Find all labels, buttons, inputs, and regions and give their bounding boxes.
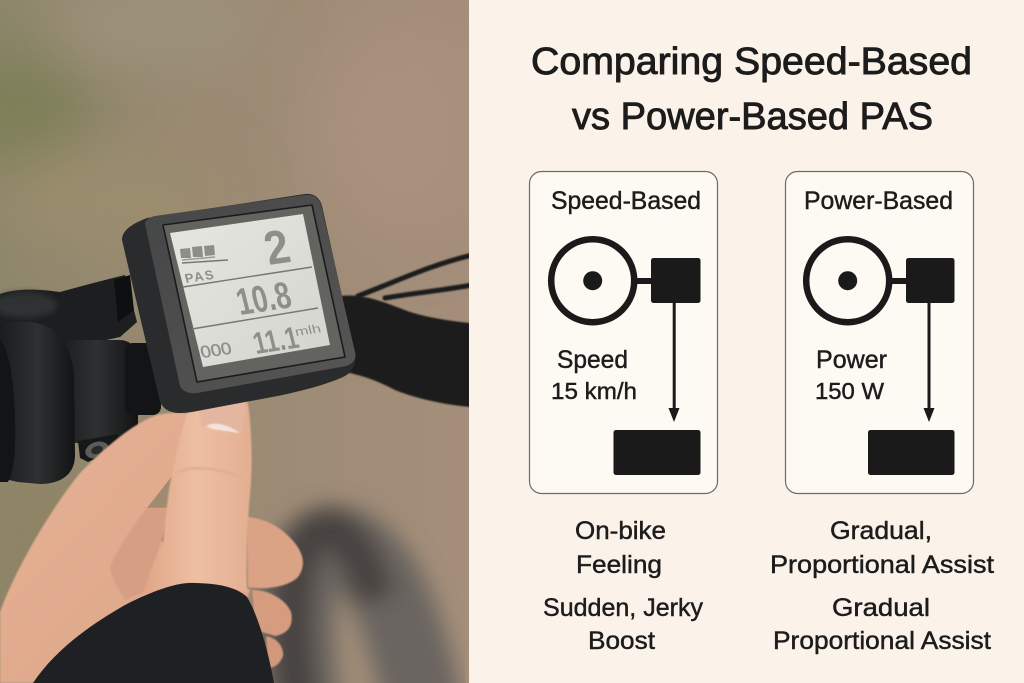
LCD reading: 10.8: 10.8 [232,275,296,324]
title: Comparing Speed-Based [531,41,972,83]
measure label: 150 W [815,378,884,404]
thumb knuckle crease [178,467,231,474]
LCD label: PAS: PAS [183,267,217,286]
text: speed-based on-bike feeling [543,517,703,655]
title [531,41,972,138]
text: speed-based on-bike feeling: Boost [588,627,655,655]
brake cables [358,255,472,298]
text: power-based on-bike feeling: Proportional Assist [770,551,994,579]
left handlebar and grip [0,275,161,484]
text: speed-based on-bike feeling: Feeling [576,551,662,579]
icon: wheel [806,239,889,322]
display bezel [145,195,355,393]
measure label: Speed [557,346,628,374]
sleeve [33,583,274,683]
connector to sensor [890,278,908,284]
panel: speed-based [530,172,718,494]
text: power-based on-bike feeling [770,517,994,655]
LCD divider lines [182,257,318,329]
arrow to motor [924,302,934,422]
panel: power-based [786,172,974,494]
LCD reading: assist level: 2 [259,221,295,276]
icon: sensor box [651,258,700,303]
photo: hand adjusting e-bike display on handlebar [0,0,490,683]
icon: sensor box [906,258,954,303]
thumb [162,402,252,591]
measure label [551,346,637,404]
text: power-based on-bike feeling: Gradual, [830,517,932,545]
measure label: 15 km/h [551,378,637,404]
hand palm [0,413,250,683]
icon: motor box [614,430,700,475]
right handlebar [340,295,470,407]
icon: wheel [551,239,634,322]
text: power-based on-bike feeling: Gradual [832,594,930,622]
inner curled fingers [110,508,172,600]
display inner rim [163,205,345,382]
thumb nail [200,402,244,432]
panel frame [786,172,974,494]
text: power-based on-bike feeling: Proportional Assist [773,627,991,655]
handlebar display unit [122,194,355,413]
icon: motor box [868,430,954,475]
hand fingers [247,517,303,668]
blurred outdoor background [0,0,490,683]
LCD reading: 000: 000 [198,339,234,362]
battery indicator [180,245,215,258]
arrow to motor [668,302,680,422]
LCD unit: mph: mlh [293,321,322,339]
title: vs Power-Based PAS [572,96,933,138]
panel heading: Speed-Based [551,187,701,215]
blurred bicycle tyre [292,528,425,683]
panel heading: Power-Based [804,187,953,215]
display housing [122,194,355,413]
measure label [815,346,887,404]
LCD screen [170,214,330,367]
panel frame [530,172,718,494]
text: speed-based on-bike feeling: Sudden, Jerky [543,594,703,622]
measure label: Power [816,346,887,374]
LCD reading: 11.1: 11.1 [249,320,302,361]
text: speed-based on-bike feeling: On-bike [575,517,666,545]
connector to sensor [635,278,653,284]
gap between palm and fingers [147,476,172,508]
